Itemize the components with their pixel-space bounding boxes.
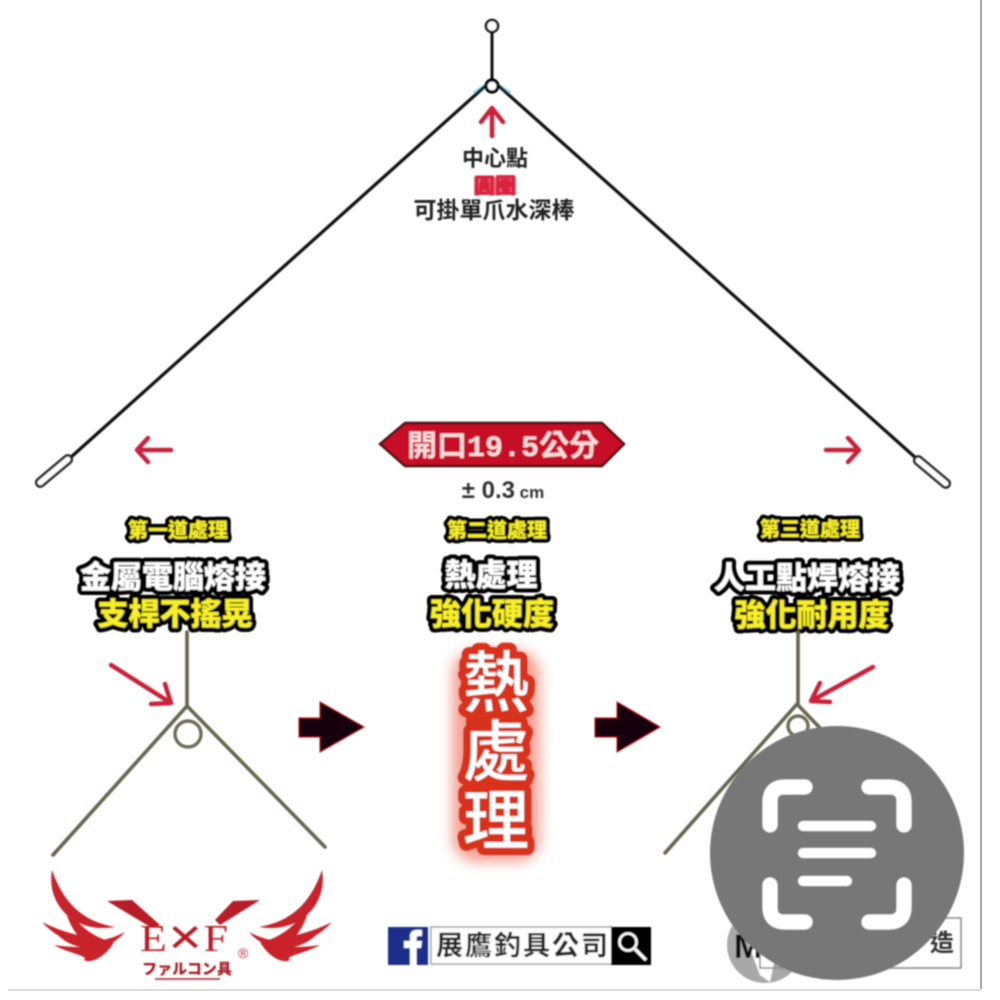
black arrow 1 xyxy=(299,702,364,752)
brand logo: ファルコン具 xyxy=(142,961,232,978)
center point caption xyxy=(414,146,574,223)
step 1 labels: 金屬電腦熔接 xyxy=(80,560,266,595)
facebook search bar xyxy=(388,927,651,965)
arrow: opening left xyxy=(137,438,171,462)
step 2 labels xyxy=(430,518,554,632)
arrow: opening right xyxy=(826,438,859,462)
arrow: points to step 3 weld xyxy=(811,667,873,702)
tolerance: ± 0.3 cm xyxy=(462,477,544,504)
scan overlay button xyxy=(710,726,964,980)
step 2 labels: 強化硬度 xyxy=(430,597,554,632)
heat treatment stamp xyxy=(452,646,540,862)
step 2 labels: 熱處理 xyxy=(444,558,538,593)
center point caption: 圓圈 xyxy=(474,175,516,198)
center point caption: 可掛單爪水深棒 xyxy=(414,197,574,223)
emblem crest xyxy=(107,900,260,928)
step 1 labels: 支桿不搖晃 xyxy=(98,597,252,632)
center point caption: 中心點 xyxy=(462,146,528,171)
black arrow 2 xyxy=(595,702,660,752)
heat treatment stamp: 處 xyxy=(463,715,529,789)
icon: search xyxy=(611,927,651,965)
step 3 labels: 強化耐用度 xyxy=(734,598,890,633)
right wire eyelet xyxy=(913,455,951,489)
step 1 labels xyxy=(80,518,266,632)
step 1 labels: 第一道處理 xyxy=(128,518,228,542)
step 3 labels: 人工點焊熔接 xyxy=(714,561,900,596)
heat treatment stamp: 理 xyxy=(463,784,529,858)
right wing xyxy=(249,870,332,961)
made-in badge, mostly hidden: 造 xyxy=(930,930,954,957)
brand logo xyxy=(42,870,332,979)
made-in badge, mostly hidden: M xyxy=(734,928,762,966)
step 3 labels xyxy=(714,517,900,633)
opening size banner xyxy=(380,423,624,466)
icon: scan frame xyxy=(770,787,904,922)
left wing xyxy=(42,870,125,961)
brand logo: ® xyxy=(238,945,249,961)
arrow: up to center point xyxy=(481,108,503,136)
left wire eyelet xyxy=(35,454,73,488)
tool: step 1 welded hanger xyxy=(53,632,325,855)
opening size banner: 開口19.5公分 xyxy=(407,431,599,466)
tool: step 3 hand-welded hanger xyxy=(665,632,820,853)
facebook search bar: 展鷹釣具公司 xyxy=(436,931,608,961)
brand logo: E✕F xyxy=(140,918,228,960)
icon: text lines xyxy=(803,826,871,881)
large wire diagram xyxy=(35,20,951,489)
arrow: points to step 1 weld xyxy=(111,665,171,704)
made-in badge, mostly hidden xyxy=(727,907,961,983)
heat treatment stamp: 熱 xyxy=(463,646,529,720)
step 2 labels: 第二道處理 xyxy=(447,518,547,542)
icon: facebook xyxy=(388,927,428,965)
step 3 labels: 第三道處理 xyxy=(760,517,860,541)
